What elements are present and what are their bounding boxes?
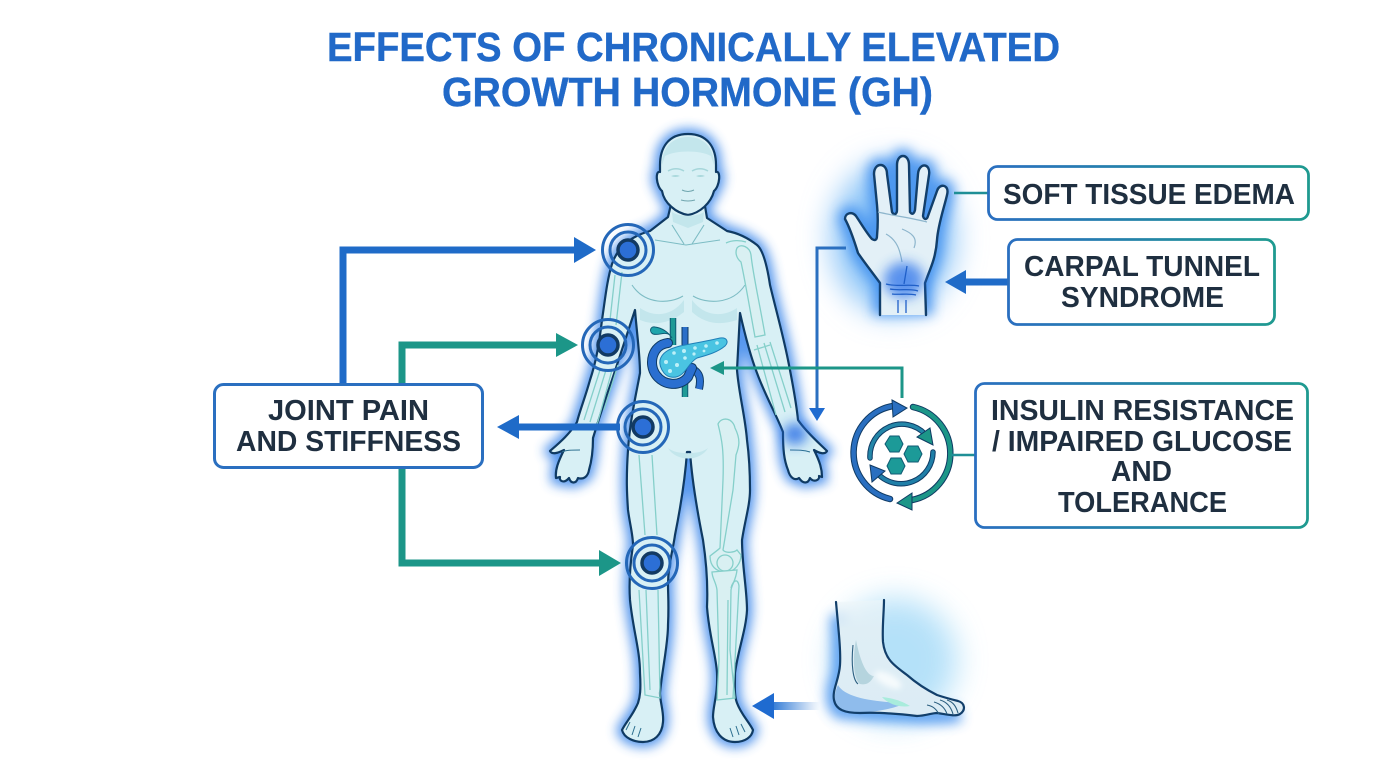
body glow bbox=[550, 134, 827, 742]
hand pale halo bbox=[831, 162, 955, 314]
label: carpal tunnel syndrome: CARPAL TUNNEL bbox=[1024, 251, 1260, 283]
head silhouette bbox=[657, 134, 719, 215]
connector: icon to label bbox=[951, 454, 975, 456]
label: insulin resistance bbox=[976, 384, 1308, 528]
connector: hand to wrist bbox=[809, 248, 846, 421]
connector: hand to soft tissue edema bbox=[954, 192, 988, 194]
label: joint pain and stiffness: JOINT PAIN bbox=[268, 395, 429, 427]
target: knee joint bbox=[626, 538, 678, 588]
chest and torso lines bbox=[632, 225, 745, 458]
label: soft tissue edema bbox=[988, 166, 1308, 220]
duodenum bbox=[652, 343, 692, 384]
toes and palm lines bbox=[562, 450, 810, 737]
label: insulin resistance: / IMPAIRED GLUCOSE bbox=[992, 426, 1292, 458]
title bbox=[327, 24, 1060, 115]
pancreas body bbox=[660, 338, 727, 377]
label: soft tissue edema: SOFT TISSUE EDEMA bbox=[1003, 179, 1295, 211]
toes bbox=[852, 645, 958, 714]
outer cycle bbox=[854, 406, 893, 499]
foot pale halo bbox=[833, 598, 957, 722]
islets bbox=[664, 341, 719, 373]
target: hip joint bbox=[618, 402, 668, 452]
swollen wrist glow bbox=[783, 423, 807, 445]
body figure bbox=[550, 134, 827, 742]
arrow: hip to joint pain bbox=[497, 415, 620, 439]
icon: metabolic cycle bbox=[854, 400, 950, 510]
hand glow bbox=[845, 156, 948, 315]
title: GROWTH HORMONE (GH) bbox=[442, 69, 933, 115]
label: carpal tunnel syndrome bbox=[1008, 240, 1274, 324]
title: EFFECTS OF CHRONICALLY ELEVATED bbox=[327, 24, 1060, 70]
arrow: foot to body bbox=[752, 693, 820, 719]
label: insulin resistance: AND bbox=[1111, 456, 1172, 488]
foot shading bbox=[835, 640, 910, 713]
hand outline bbox=[845, 156, 948, 315]
arm bones bbox=[584, 241, 791, 425]
arrow: joint pain to knee bbox=[402, 466, 621, 576]
target: shoulder joint bbox=[602, 224, 654, 276]
body silhouette bbox=[550, 200, 827, 742]
leg bones bbox=[639, 419, 741, 700]
pancreas bbox=[651, 318, 727, 397]
target: elbow joint bbox=[582, 320, 634, 370]
face and hair shading bbox=[662, 137, 714, 228]
lower vessels bbox=[682, 378, 688, 397]
upper vessels bbox=[670, 318, 676, 345]
wrist inflammation bbox=[884, 262, 924, 298]
foot glow bbox=[834, 615, 960, 716]
inner cycle bbox=[870, 424, 925, 458]
label: insulin resistance: TOLERANCE bbox=[1058, 487, 1227, 519]
arrow: metabolism to pancreas bbox=[710, 361, 902, 398]
foot fill bbox=[834, 600, 964, 716]
label: joint pain and stiffness: AND STIFFNESS bbox=[236, 426, 461, 458]
label: carpal tunnel syndrome: SYNDROME bbox=[1061, 282, 1224, 314]
palm creases bbox=[878, 212, 927, 262]
arrow: carpal tunnel to wrist bbox=[945, 270, 1008, 294]
arrow: joint pain to shoulder bbox=[343, 237, 596, 386]
label: joint pain and stiffness bbox=[214, 384, 482, 468]
hand illustration bbox=[831, 156, 955, 315]
hexagons bbox=[885, 436, 922, 474]
label: insulin resistance: INSULIN RESISTANCE bbox=[991, 395, 1294, 427]
foot illustration bbox=[833, 598, 964, 722]
arrow: joint pain to elbow bbox=[402, 333, 578, 386]
foot outline bbox=[834, 600, 964, 716]
